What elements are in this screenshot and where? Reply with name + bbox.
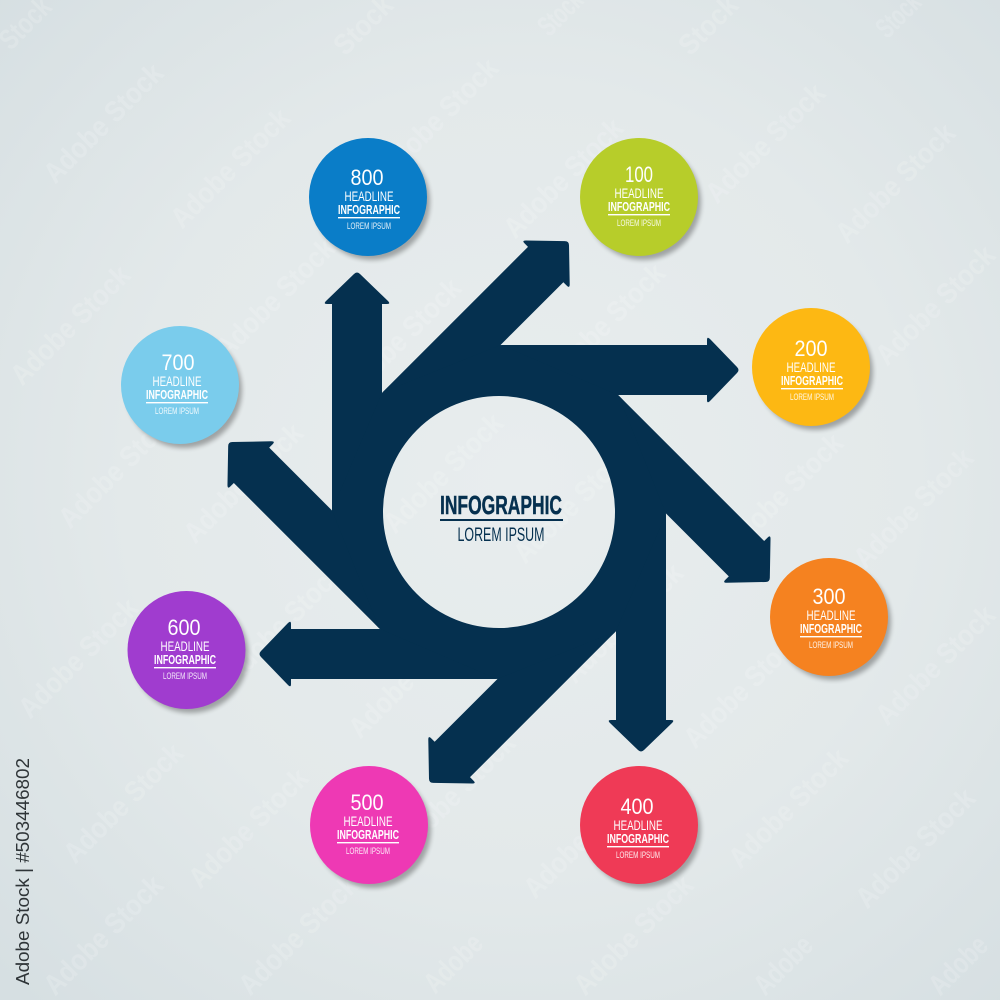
badge 100 <box>580 138 701 260</box>
badge 100: HEADLINE <box>614 185 664 201</box>
arrow to 400 <box>609 514 673 752</box>
badge 700: HEADLINE <box>152 373 202 389</box>
badge 700: LOREM IPSUM <box>155 406 199 417</box>
watermark pattern: Adobe Stock <box>850 782 982 915</box>
stock id side text: Adobe Stock | #503446802 <box>13 758 33 985</box>
badge 800: HEADLINE <box>344 188 394 204</box>
watermark pattern: Adobe Stock <box>38 57 170 190</box>
watermark pattern: Adobe Stock <box>343 612 475 745</box>
badge 100: 100 <box>625 162 653 187</box>
badge 400: INFOGRAPHIC <box>607 831 669 846</box>
arrow to 200 <box>501 338 738 402</box>
watermark pattern: Adobe Stock <box>498 112 630 245</box>
watermark pattern: Adobe Stock <box>178 417 310 550</box>
watermark pattern: Adobe Stock <box>183 762 315 895</box>
watermark pattern: Adobe Stock <box>700 77 832 210</box>
central pinwheel of arrows <box>206 219 792 805</box>
badge 800: LOREM IPSUM <box>347 221 391 232</box>
watermark pattern: Adobe Stock <box>830 117 962 250</box>
watermark pattern: Adobe Stock <box>718 427 850 560</box>
arrow to 100 <box>377 219 591 433</box>
badge 200 <box>752 308 873 430</box>
watermark pattern: Adobe Stock <box>218 557 350 690</box>
watermark pattern: Adobe Stock <box>678 622 810 755</box>
watermark pattern: Adobe Stock <box>518 772 650 905</box>
badge 200: 200 <box>794 336 828 361</box>
badge 400: 400 <box>620 794 654 819</box>
badge 500 <box>310 766 431 888</box>
arrow to 700 <box>206 420 420 634</box>
watermark pattern: Adobe Stock <box>13 592 145 725</box>
watermark pattern: Adobe Stock <box>508 437 640 570</box>
badge 300 <box>770 558 891 680</box>
badge 600: LOREM IPSUM <box>163 671 207 682</box>
watermark pattern: Adobe Stock <box>336 272 468 405</box>
watermark pattern: Adobe Stock <box>378 407 510 540</box>
watermark pattern: Adobe Stock <box>5 259 137 392</box>
badge 600: INFOGRAPHIC <box>154 652 216 667</box>
centre title: LOREM IPSUM <box>458 525 544 546</box>
badge 700: INFOGRAPHIC <box>146 387 208 402</box>
watermark pattern: Adobe <box>418 928 490 1000</box>
arrow to 500 <box>407 591 621 805</box>
watermark pattern: Adobe Stock <box>210 232 342 365</box>
badge 500: HEADLINE <box>344 813 392 829</box>
badge 300: HEADLINE <box>806 607 856 623</box>
badge 300: LOREM IPSUM <box>809 640 853 651</box>
badge 700: 700 <box>162 350 194 375</box>
arrow to 600 <box>260 622 497 686</box>
centre title: INFOGRAPHIC <box>440 490 562 520</box>
watermark pattern: Adobe Stock <box>540 257 672 390</box>
arrow to 300 <box>578 390 792 604</box>
watermark pattern: Adobe Stock <box>723 742 855 875</box>
badge 800: 800 <box>350 165 384 190</box>
badge 400: LOREM IPSUM <box>616 850 660 861</box>
badge 200: HEADLINE <box>786 359 836 375</box>
badge 800: INFOGRAPHIC <box>338 202 400 217</box>
watermark pattern: Adobe Stock <box>53 402 185 535</box>
badge 500: 500 <box>350 790 384 815</box>
watermark pattern: Adobe <box>748 930 820 1000</box>
badge 300: 300 <box>812 584 846 609</box>
watermark pattern: Adobe Stock <box>373 52 505 185</box>
watermark pattern: Adobe Stock <box>58 737 190 870</box>
badge 200: LOREM IPSUM <box>790 392 834 403</box>
badge 300: INFOGRAPHIC <box>800 621 862 636</box>
watermark pattern: Adobe Stock <box>233 869 365 1000</box>
watermark pattern: Adobe Stock <box>165 102 297 235</box>
watermark pattern: Adobe Stock <box>568 869 700 1000</box>
watermark pattern: Adobe Stock <box>38 869 170 1000</box>
badge 500: LOREM IPSUM <box>346 846 390 857</box>
watermark pattern: Adobe Stock <box>390 727 522 860</box>
badge 600: HEADLINE <box>160 638 210 654</box>
badge 600: 600 <box>168 615 200 640</box>
badge 200: INFOGRAPHIC <box>781 373 843 388</box>
watermark pattern: Adobe Stock <box>558 557 690 690</box>
badge 800 <box>309 138 430 260</box>
badge 500: INFOGRAPHIC <box>337 827 399 842</box>
badge 400: HEADLINE <box>614 817 662 833</box>
badge 100: INFOGRAPHIC <box>608 199 670 214</box>
watermark pattern: Adobe Stock <box>848 442 980 575</box>
badge 600 <box>128 591 248 713</box>
badge 100: LOREM IPSUM <box>617 218 661 229</box>
arrow to 800 <box>325 272 389 510</box>
badge 700 <box>121 326 242 448</box>
centre title <box>440 490 563 546</box>
badge 400 <box>580 766 701 888</box>
hub ring <box>358 370 640 654</box>
